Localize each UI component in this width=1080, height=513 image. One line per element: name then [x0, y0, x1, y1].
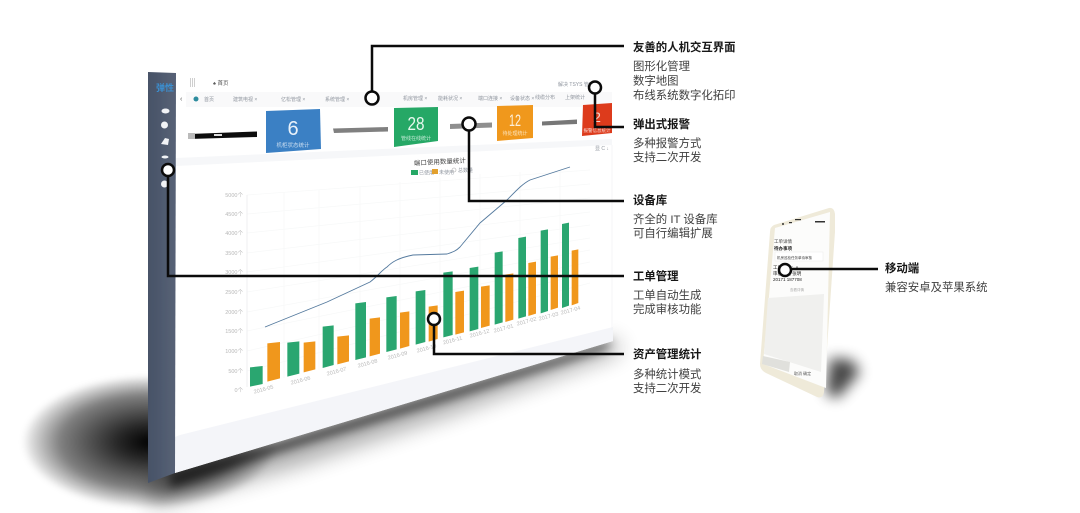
- y axis labels: 0个: [234, 387, 243, 394]
- phone message text: 机房巡检任务单待审核: [777, 255, 812, 260]
- tab bar: 亿松管理 ×: [281, 96, 305, 103]
- chart: port count statistics: [225, 145, 612, 396]
- lower grey band: [175, 327, 613, 473]
- text: asset statistics: 支持二次开发: [633, 381, 701, 395]
- x axis labels: 2017-01: [493, 324, 514, 335]
- chart: port count statistics: 显 C ↓: [595, 146, 609, 152]
- main content area: [175, 73, 613, 473]
- y axis labels: 5000个: [225, 192, 243, 199]
- tab bar: 系统管理 ×: [325, 96, 349, 103]
- x axis labels: [253, 306, 581, 396]
- stat card: orange: 待处理统计: [502, 130, 528, 137]
- x axis labels: 2016-09: [387, 351, 408, 362]
- grid lines: [247, 145, 612, 378]
- phone: mobile client: [760, 208, 835, 397]
- y axis labels: 1500个: [225, 328, 243, 335]
- text: popup alarm: [633, 117, 702, 164]
- text: popup alarm: 支持二次开发: [633, 150, 701, 164]
- x axis labels: 2016-08: [357, 359, 378, 370]
- text: popup alarm: 多种报警方式: [633, 136, 702, 150]
- text: work order: [633, 269, 701, 316]
- stat card: green: 管线在线统计: [401, 135, 431, 142]
- y axis labels: 3500个: [225, 250, 243, 257]
- top header: [190, 78, 594, 88]
- tab bar: 线缆分布: [535, 94, 555, 101]
- phone shadow: [826, 358, 860, 398]
- phone message text: [773, 238, 823, 376]
- y axis labels: 2000个: [225, 309, 243, 316]
- chart title: 端口使用数量统计: [414, 156, 467, 167]
- phone body: [760, 208, 835, 397]
- leader: friendly interface: [366, 46, 624, 104]
- x axis labels: 2016-07: [326, 367, 347, 378]
- chart legend: 未使用: [439, 169, 454, 176]
- phone message text: 待办事项: [774, 245, 792, 252]
- stat card: blue: [266, 109, 321, 153]
- text: friendly interface: 友善的人机交互界面: [633, 40, 736, 54]
- text: device library: [633, 193, 718, 240]
- text: popup alarm: 弹出式报警: [633, 117, 691, 131]
- stat card: red: [582, 103, 612, 136]
- stat card: green: [394, 107, 438, 147]
- phone screen: [763, 212, 830, 388]
- device image 4: [542, 120, 577, 126]
- text: mobile: [885, 261, 988, 294]
- text: mobile: 移动端: [885, 261, 919, 275]
- y axis labels: 3000个: [225, 269, 243, 276]
- phone grey content: [764, 294, 824, 372]
- x axis labels: 2016-05: [253, 385, 274, 396]
- x axis labels: 2016-06: [290, 376, 311, 387]
- text: device library: 齐全的 IT 设备库: [633, 212, 718, 226]
- x axis labels: 2016-11: [442, 336, 463, 346]
- trend line: [265, 167, 570, 327]
- phone message text: 审核人员 张明: [773, 270, 802, 277]
- y axis labels: 4500个: [225, 211, 243, 218]
- text: friendly interface: 数字地图: [633, 74, 679, 88]
- text: device library: 设备库: [633, 193, 667, 207]
- sidebar: [148, 72, 176, 483]
- device image 3: [450, 122, 492, 129]
- text: work order: 工单自动生成: [633, 288, 701, 302]
- stat card: red: 2: [593, 109, 601, 125]
- text: friendly interface: 布线系统数字化拓印: [633, 88, 736, 102]
- leader: popup alarm: [589, 82, 624, 127]
- leader: device library: [462, 118, 624, 201]
- phone message text: 工单编号：A: [773, 264, 799, 271]
- tab bar: 上架统计: [565, 94, 585, 101]
- tab bar: ‹: [180, 96, 183, 103]
- bars: [250, 223, 578, 387]
- x axis labels: 2016-10: [416, 344, 437, 355]
- tab bar: 机房管理 ×: [403, 95, 427, 102]
- leader: asset statistics: [428, 313, 624, 354]
- stat card: orange: [497, 105, 533, 141]
- text: work order: 完成审核功能: [633, 302, 701, 316]
- stat card: orange: 12: [509, 111, 521, 130]
- text: asset statistics: [633, 347, 702, 395]
- device image 2: [333, 127, 388, 133]
- y axis labels: 1000个: [225, 348, 243, 355]
- y axis labels: 4000个: [225, 230, 243, 237]
- stat card: red: 报警信息统计: [584, 127, 611, 134]
- text: friendly interface: 图形化管理: [633, 59, 691, 73]
- text: device library: 可自行编辑扩展: [633, 226, 713, 240]
- phone message text: 查看详情: [790, 287, 804, 292]
- sidebar logo: 弹性: [156, 82, 174, 93]
- chart legend: [411, 167, 473, 176]
- tab bar: 建筑电视 ×: [233, 96, 257, 103]
- chart legend: 已使用: [419, 170, 434, 176]
- panel: dashboard screen: [148, 72, 613, 483]
- phone input bar: [762, 356, 790, 372]
- text: mobile: 兼容安卓及苹果系统: [885, 280, 988, 294]
- tab bar: 首页: [204, 96, 214, 103]
- phone message text: 20171 187708: [773, 277, 802, 282]
- x axis labels: 2017-02: [516, 317, 537, 328]
- sidebar icons: [161, 108, 170, 188]
- panel shadow: [22, 338, 622, 508]
- stat card: blue: 6: [287, 118, 299, 140]
- phone message text: 取消 确定: [794, 370, 811, 376]
- tab bar: 能耗状况 ×: [438, 95, 462, 102]
- device image 1: [188, 132, 257, 139]
- top header: ♠ 首页: [213, 79, 229, 87]
- y axis labels: 500个: [228, 368, 243, 375]
- phone status bar: [782, 219, 825, 225]
- stat card: blue: 机柜状态统计: [276, 141, 310, 149]
- x axis labels: 2016-12: [469, 329, 490, 340]
- x axis labels: 2017-03: [538, 312, 559, 323]
- chart legend: 总数量: [458, 167, 473, 174]
- leader: mobile: [779, 264, 878, 276]
- y axis labels: [225, 192, 243, 394]
- phone message text: 工单详情: [774, 238, 792, 245]
- stat card: green: 28: [408, 114, 424, 134]
- divider band under cards: [176, 139, 612, 166]
- x axis labels: 2017-04: [560, 306, 581, 317]
- text: work order: 工单管理: [633, 269, 679, 283]
- leader: work order: [162, 164, 624, 276]
- tab bar: [180, 92, 612, 107]
- text: asset statistics: 资产管理统计: [633, 347, 702, 361]
- tab bar: 端口连接 ×: [478, 95, 502, 102]
- y axis labels: 2500个: [225, 289, 243, 296]
- tab bar: 设备状态 ×: [510, 95, 534, 102]
- text: friendly interface: [633, 40, 736, 102]
- top header: 解决 TSYS 管理: [558, 81, 594, 88]
- text: asset statistics: 多种统计模式: [633, 367, 702, 381]
